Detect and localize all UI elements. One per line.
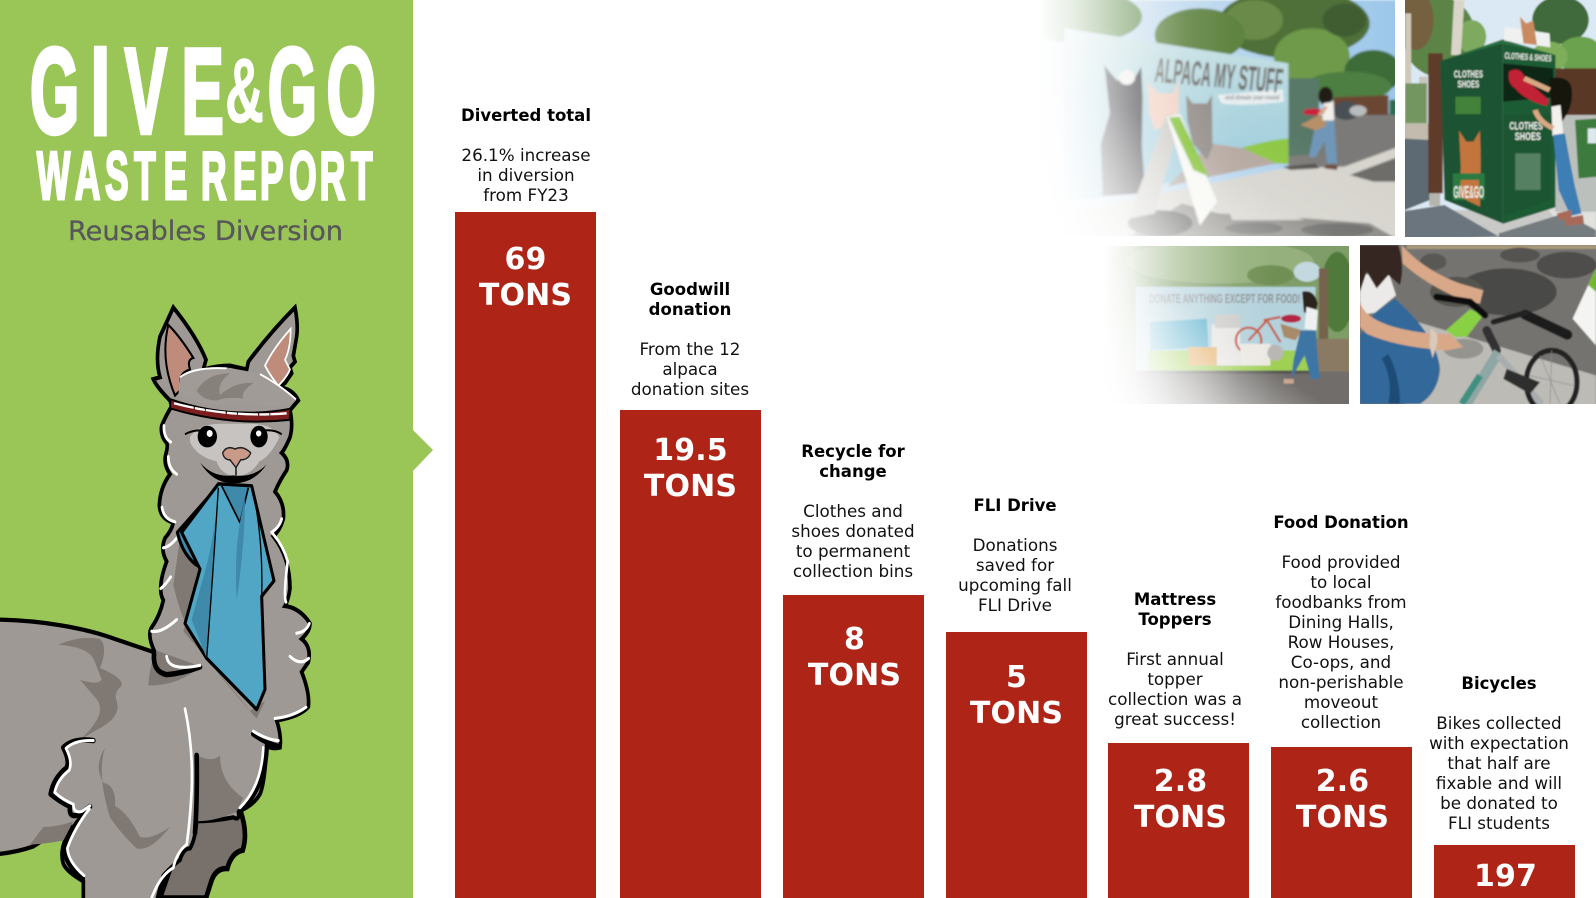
text: Food Donation: foodbanks from (1275, 592, 1407, 612)
fence, gate, cars (1334, 95, 1388, 115)
value: 69 tons: 69 (504, 242, 547, 277)
text: FLI Drive: FLI Drive (973, 496, 1057, 515)
text: Diverted total: Diverted total (461, 106, 591, 125)
woman with box (1318, 87, 1333, 105)
text: Goodwill donation: Goodwill (650, 280, 730, 299)
text: Food Donation: non-perishable (1278, 672, 1404, 692)
value: 8 tons (808, 622, 901, 693)
title: Give & Go Waste Report: & (225, 40, 264, 142)
value: 8 tons: TONS (808, 658, 901, 693)
banner (1064, 28, 1288, 202)
bin labels (1454, 50, 1552, 143)
value: 19.5 tons: TONS (644, 469, 737, 504)
text: Diverted total: in diversion (477, 165, 575, 185)
text: Bicycles: FLI students (1448, 813, 1550, 833)
front wheel (1526, 350, 1577, 414)
photo: Alpaca My Stuff banner (1049, 0, 1395, 236)
photo: Donate anything except for food banner (1114, 246, 1349, 404)
text: Bicycles: that half are (1447, 753, 1551, 773)
text: FLI Drive: saved for (976, 555, 1054, 575)
bin (1440, 41, 1502, 223)
jeans (1360, 299, 1440, 404)
text: FLI Drive: FLI Drive (978, 595, 1052, 615)
bin alpaca (1459, 131, 1481, 207)
A-frame sign (1128, 115, 1182, 218)
headband (170, 399, 291, 422)
bar: Recycle for change (783, 595, 924, 898)
value: 8 tons: 8 (844, 622, 865, 657)
text: Recycle for change: shoes donated (791, 521, 915, 541)
text: Bicycles: fixable and will (1436, 773, 1562, 793)
fences (1428, 53, 1443, 193)
value: 19.5 tons: 19.5 (653, 433, 728, 468)
text: Mattress Toppers: great success! (1114, 709, 1236, 729)
white fade (1103, 246, 1349, 404)
text: Food Donation: Dining Halls, (1288, 612, 1394, 632)
fur outlines (51, 426, 309, 898)
bin labels: SHOES (1458, 80, 1479, 91)
title: Give & Go Waste Report: WASTE REPORT (37, 139, 373, 214)
arrow: sidebar pointer (413, 430, 433, 471)
woman with box (1302, 291, 1318, 319)
text: Mattress Toppers: Toppers (1138, 610, 1212, 629)
value: 5 tons: TONS (970, 696, 1063, 731)
text: Food Donation: Food provided (1281, 552, 1401, 572)
trees and trunks (1403, 0, 1475, 77)
text: Bicycles: Bicycles (1461, 674, 1537, 693)
text: Bicycles: be donated to (1440, 793, 1558, 813)
white fade (1038, 0, 1395, 236)
text: Food Donation: to local (1310, 572, 1372, 592)
clothing (1509, 70, 1549, 106)
text: Goodwill donation: alpaca (662, 359, 718, 379)
text: Recycle for change: change (819, 462, 887, 481)
bin labels: SHOES (1515, 129, 1541, 143)
value: 2.6 tons: TONS (1296, 800, 1389, 835)
ground (1100, 372, 1354, 408)
text: Goodwill donation: From the 12 (640, 339, 740, 359)
value: 69 tons: TONS (479, 278, 572, 313)
text: Mattress Toppers: First annual (1126, 649, 1224, 669)
photo: green clothes and shoes donation bin: GIVE&GO (1454, 183, 1484, 202)
bin labels: CLOTHES (1454, 70, 1483, 81)
bin labels: CLOTHES (1509, 119, 1543, 132)
text: FLI Drive: Donations (973, 535, 1057, 555)
value: 2.8 tons (1134, 764, 1227, 835)
bin labels: CLOTHES & SHOES (1504, 50, 1552, 63)
handlebars (1437, 297, 1567, 350)
subtitle: Reusables Diversion: Reusables Diversion (68, 216, 343, 247)
text: Food Donation (1273, 513, 1409, 732)
bar: Bicycles (1434, 845, 1575, 898)
text: Food Donation: moveout (1304, 692, 1378, 712)
arms (1360, 302, 1463, 350)
text: Diverted total (461, 106, 591, 205)
photo: Alpaca My Stuff banner: and donate year-round (1225, 93, 1280, 101)
fur shading (30, 538, 265, 849)
bandana (177, 484, 274, 710)
value: 19.5 tons (644, 433, 737, 504)
bar: Food Donation (1271, 747, 1412, 898)
ground (1288, 113, 1399, 240)
title: Give & Go Waste Report: GIVE (30, 23, 224, 159)
panel: green sidebar (0, 0, 413, 898)
text: Mattress Toppers: Mattress (1134, 590, 1216, 609)
text: Goodwill donation: donation (649, 300, 731, 319)
back leg (160, 810, 245, 898)
value: 2.8 tons: TONS (1134, 800, 1227, 835)
value: 2.6 tons: 2.6 (1316, 764, 1369, 799)
text: Goodwill donation (631, 280, 749, 399)
text: Bicycles: with expectation (1429, 733, 1569, 753)
sign at the right edge (1573, 268, 1596, 345)
text: Diverted total: from FY23 (483, 185, 569, 205)
bar: Mattress Toppers (1108, 743, 1249, 898)
ground (1401, 123, 1430, 147)
text: Mattress Toppers: topper (1147, 669, 1203, 689)
face (190, 424, 279, 476)
text: Recycle for change: Clothes and (803, 501, 903, 521)
bicycle frame (1467, 352, 1498, 404)
value: 2.8 tons: 2.8 (1154, 764, 1207, 799)
body and neck (0, 307, 310, 898)
banner (1136, 287, 1316, 371)
banner alpacas (1101, 65, 1146, 197)
title: Give & Go Waste Report (30, 23, 376, 247)
bar: FLI Drive (946, 632, 1087, 898)
text: Food Donation: Co-ops, and (1291, 652, 1391, 672)
eyes (185, 426, 282, 447)
text: Mattress Toppers: collection was a (1108, 689, 1242, 709)
trees (1218, 0, 1370, 58)
text: Bicycles (1429, 674, 1569, 833)
value: 5 tons (970, 660, 1063, 731)
text: Diverted total: 26.1% increase (461, 145, 591, 165)
value: 69 tons (479, 242, 572, 313)
illustration: alpaca mascot with blue bandana (0, 304, 312, 898)
pavement (1407, 245, 1596, 249)
value: 2.6 tons (1296, 764, 1389, 835)
text: Recycle for change (791, 442, 915, 581)
text: FLI Drive: upcoming fall (958, 575, 1072, 595)
text: Food Donation: Food Donation (1273, 513, 1409, 532)
top sign (1504, 27, 1550, 47)
title: Give & Go Waste Report: GO (268, 23, 376, 159)
text: Bicycles: Bikes collected (1436, 713, 1562, 733)
value: 5 tons: 5 (1006, 660, 1027, 695)
text: Food Donation: collection (1301, 712, 1381, 732)
green tag (1446, 309, 1483, 337)
text: Food Donation: Row Houses, (1288, 632, 1394, 652)
text: Recycle for change: collection bins (793, 561, 913, 581)
text: Recycle for change: to permanent (796, 541, 910, 561)
text: Recycle for change: Recycle for (801, 442, 905, 461)
text: Mattress Toppers (1108, 590, 1242, 729)
recycling bins (1575, 118, 1596, 178)
value: 197: 197 (1474, 859, 1537, 894)
hair tuft (178, 367, 296, 407)
nose and mouth (200, 448, 267, 483)
rider shirt and hair (1360, 272, 1396, 315)
bar: Goodwill donation (620, 410, 761, 898)
text: FLI Drive (958, 496, 1072, 615)
photo: green clothes and shoes donation bin (1405, 0, 1596, 237)
bar: Diverted total (455, 212, 596, 898)
text: Goodwill donation: donation sites (631, 379, 749, 399)
woman (1550, 78, 1572, 123)
photo: tagging a bicycle (1360, 245, 1596, 404)
ears (165, 325, 193, 395)
